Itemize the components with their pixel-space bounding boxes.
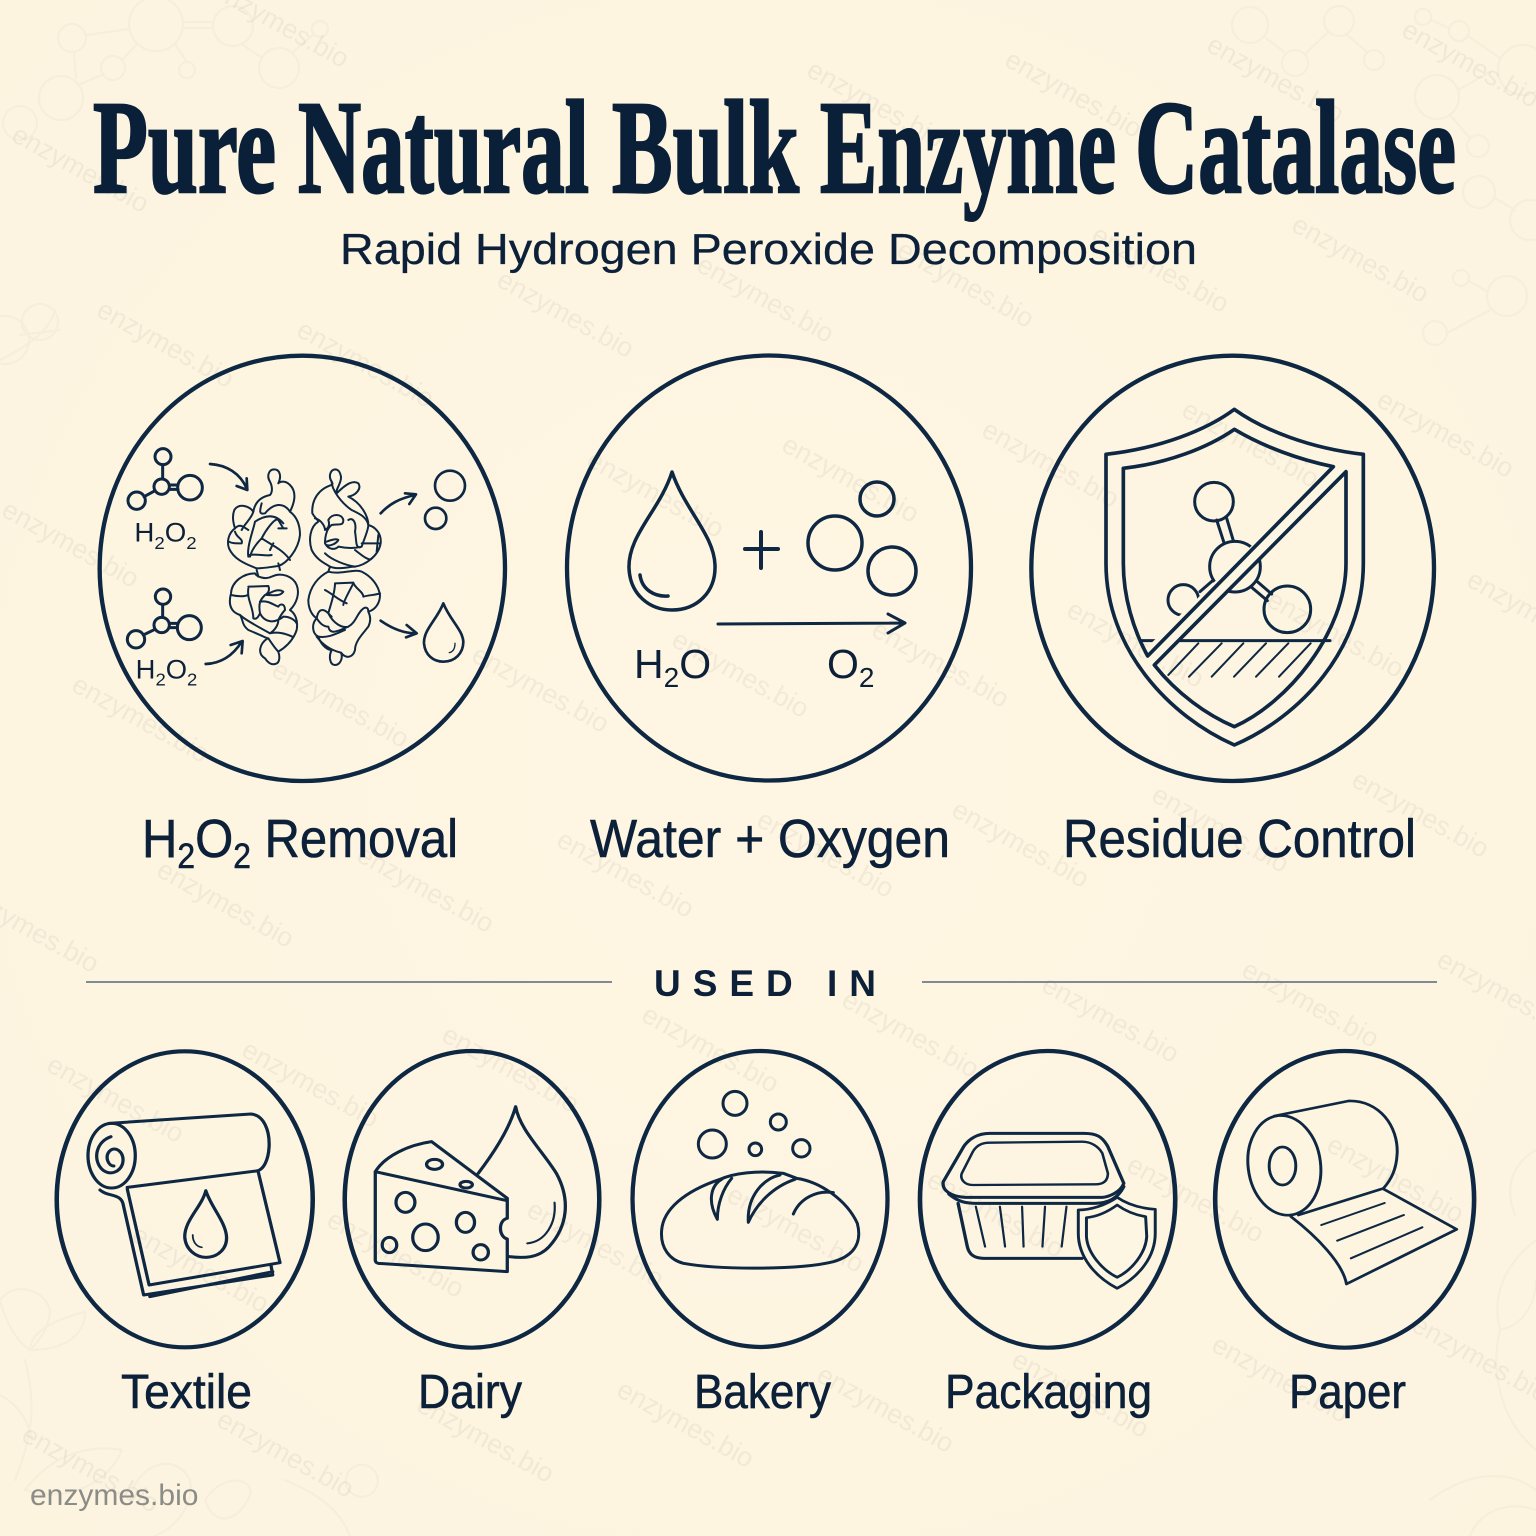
H2O2 labels: 2 — [186, 533, 197, 553]
H2O label: 2 — [664, 662, 679, 693]
molecule — [1168, 482, 1311, 633]
oxygen bubbles and water drop products — [424, 471, 465, 662]
H2O2 labels: 2 — [187, 670, 197, 690]
footer brand: enzymes.bio — [30, 1479, 198, 1512]
title: Bulk — [612, 73, 799, 221]
watermark pattern: enzymes.bio — [1287, 209, 1434, 309]
watermark pattern: enzymes.bio — [42, 1049, 189, 1149]
shield — [1106, 409, 1363, 745]
heading: H2O2 Removal: Removal — [251, 809, 458, 869]
heading: Residue Control: Residue Control — [1063, 809, 1416, 869]
watermark pattern: enzymes.bio — [0, 494, 144, 594]
watermark pattern: enzymes.bio — [522, 1194, 669, 1294]
title: Enzyme — [820, 73, 1116, 221]
watermark pattern: enzymes.bio — [322, 1204, 469, 1304]
watermark pattern: enzymes.bio — [722, 1179, 869, 1279]
watermark pattern: enzymes.bio — [1372, 384, 1519, 484]
H2O2 labels: O — [165, 518, 186, 548]
panel: water plus oxygen icon — [567, 356, 971, 780]
watermark pattern: enzymes.bio — [1000, 44, 1147, 144]
panel: packaging icon — [920, 1051, 1175, 1348]
panel: bakery icon — [632, 1051, 888, 1347]
rising bubbles and bread loaf — [661, 1091, 859, 1268]
watermark pattern: enzymes.bio — [692, 249, 839, 349]
watermark pattern: enzymes.bio — [467, 639, 614, 739]
H2O2 labels: H — [134, 518, 154, 548]
label: Bakery: Bakery — [694, 1366, 831, 1419]
fabric roll and sheet — [88, 1114, 280, 1297]
watermark pattern: enzymes.bio — [492, 264, 639, 364]
watermark pattern: enzymes.bio — [1147, 779, 1294, 879]
watermark pattern: enzymes.bio — [67, 669, 214, 769]
O2 label: 2 — [859, 662, 874, 693]
residue hatching — [1142, 641, 1330, 677]
reaction arrows — [206, 464, 417, 664]
section divider: used in: USED IN — [654, 963, 876, 1004]
subtitle: Rapid Hydrogen Peroxide Decomposition — [340, 225, 1197, 274]
watermark pattern: enzymes.bio — [152, 854, 299, 954]
reaction arrow — [718, 614, 905, 633]
H2O2 labels: O — [166, 654, 187, 684]
protective shield — [1078, 1197, 1155, 1288]
watermark pattern: enzymes.bio — [802, 54, 949, 154]
oxygen bubbles — [808, 482, 916, 595]
heading: H2O2 Removal: 2 — [177, 837, 195, 876]
watermark pattern: enzymes.bio — [437, 1019, 584, 1119]
heading: H2O2 Removal: H — [142, 809, 181, 869]
watermark pattern: enzymes.bio — [1322, 1129, 1469, 1229]
water drop — [629, 472, 715, 610]
watermark pattern: enzymes.bio — [867, 614, 1014, 714]
watermark pattern: enzymes.bio — [977, 414, 1124, 514]
watermark pattern: enzymes.bio — [777, 429, 924, 529]
watermark pattern: enzymes.bio — [837, 984, 984, 1084]
panel: paper icon — [1215, 1051, 1474, 1348]
watermark pattern: enzymes.bio — [352, 839, 499, 939]
watermark pattern: enzymes.bio — [1237, 954, 1384, 1054]
watermark pattern: enzymes.bio — [637, 999, 784, 1099]
watermark pattern: enzymes.bio — [752, 804, 899, 904]
H2O2 labels: 2 — [154, 533, 165, 553]
watermark pattern: enzymes.bio — [1207, 1329, 1354, 1429]
watermark pattern: enzymes.bio — [1062, 594, 1209, 694]
title — [93, 73, 1456, 221]
watermark pattern: enzymes.bio — [1007, 1344, 1154, 1444]
watermark pattern: enzymes.bio — [237, 1034, 384, 1134]
panel: H2O2 removal icon — [100, 356, 505, 781]
heading: H2O2 Removal: O — [195, 809, 233, 869]
watermark pattern: enzymes.bio — [667, 624, 814, 724]
watermark pattern: enzymes.bio — [892, 234, 1039, 334]
watermark pattern: enzymes.bio — [552, 824, 699, 924]
label: Dairy: Dairy — [418, 1366, 522, 1419]
heading: Water + Oxygen: Water + Oxygen — [590, 809, 950, 869]
slash band — [1140, 465, 1348, 667]
panel: residue control icon — [1031, 356, 1434, 781]
H2O2 labels — [134, 518, 197, 690]
H2O2 labels: 2 — [155, 670, 166, 690]
watermark pattern: enzymes.bio — [947, 794, 1094, 894]
watermark pattern: enzymes.bio — [922, 1164, 1069, 1264]
panel: textile icon — [57, 1051, 313, 1347]
watermark pattern: enzymes.bio — [412, 1389, 559, 1489]
food container — [943, 1133, 1124, 1258]
watermark pattern: enzymes.bio — [812, 1359, 959, 1459]
watermark pattern: enzymes.bio — [7, 119, 154, 219]
watermark pattern: enzymes.bio — [612, 1374, 759, 1474]
watermark pattern: enzymes.bio — [1202, 29, 1349, 129]
panel: dairy icon — [345, 1051, 599, 1348]
heading: H2O2 Removal: 2 — [233, 837, 251, 876]
O2 label: O — [827, 641, 859, 687]
label: Packaging: Packaging — [945, 1366, 1152, 1419]
plus sign — [745, 532, 778, 568]
watermark pattern: enzymes.bio — [1262, 584, 1409, 684]
H2O2 molecules — [127, 449, 202, 648]
cheese and milk drop — [375, 1107, 565, 1272]
label: Textile: Textile — [121, 1366, 252, 1419]
label: Paper: Paper — [1289, 1366, 1406, 1419]
watermark pattern: enzymes.bio — [292, 314, 439, 414]
watermark pattern: enzymes.bio — [1122, 1149, 1269, 1249]
H2O label: H — [634, 641, 664, 687]
paper roll — [1242, 1101, 1457, 1284]
H2O2 labels: H — [136, 654, 155, 684]
watermark pattern: enzymes.bio — [267, 654, 414, 754]
watermark pattern: enzymes.bio — [1177, 394, 1324, 494]
watermark pattern: enzymes.bio — [1347, 764, 1494, 864]
watermark pattern: enzymes.bio — [212, 1404, 359, 1504]
title: Natural — [298, 73, 589, 221]
watermark pattern: enzymes.bio — [582, 444, 729, 544]
watermark pattern: enzymes.bio — [1037, 969, 1184, 1069]
watermark pattern: enzymes.bio — [1087, 219, 1234, 319]
title: Pure — [93, 73, 276, 221]
watermark pattern: enzymes.bio — [92, 294, 239, 394]
H2O label: O — [679, 641, 711, 687]
enzyme tetramer — [228, 469, 381, 665]
watermark pattern: enzymes.bio — [17, 1419, 164, 1519]
watermark pattern: enzymes.bio — [127, 1219, 274, 1319]
